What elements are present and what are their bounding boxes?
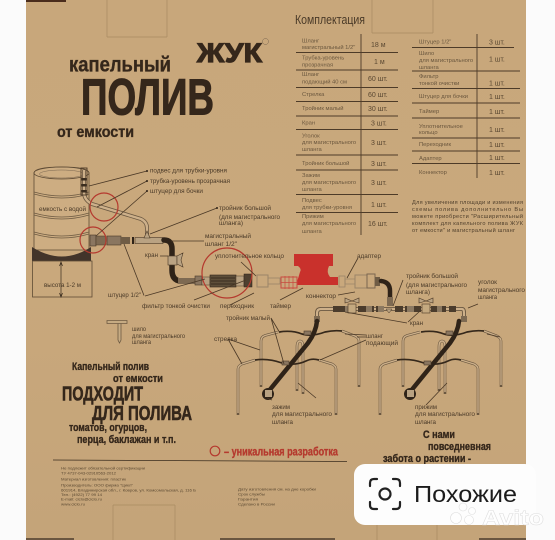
red circles xyxy=(80,193,252,298)
label: tank: емкость с водой xyxy=(39,206,87,213)
text block: certification: Материал изготовления: пластик xyxy=(61,478,126,482)
text block: expansion note: схемы полива дополнительно Вы xyxy=(412,207,523,213)
text block: expansion note: Для увеличения площади и изменения xyxy=(412,200,523,206)
logo: Жук: ЖУК xyxy=(196,38,263,68)
table: contents right: шланга xyxy=(419,65,439,71)
labels: diagram callouts: таймер xyxy=(270,303,292,310)
labels: diagram callouts: прижим xyxy=(415,404,437,411)
table: contents left: Тройник малый xyxy=(302,105,343,112)
table: contents left: для трубки-уровня xyxy=(302,205,352,211)
text block: certification: 601914, Владимирская обл., г. Ковров, ул. Комсомольская, д. 116 Б xyxy=(61,488,197,492)
table: contents left: 3 шт. xyxy=(371,161,387,168)
table: contents right: тонкой очистки xyxy=(419,80,459,87)
labels: diagram callouts: шланг 1/2" xyxy=(205,241,237,248)
table: contents left: Шланг xyxy=(302,38,319,44)
text block: certification xyxy=(61,466,197,506)
labels: diagram callouts: адаптер xyxy=(357,253,382,260)
table: contents right: 1 шт. xyxy=(489,155,505,162)
table: contents left: Прижим xyxy=(302,214,324,220)
icon: awl with label: шланга xyxy=(132,339,152,346)
text block: production date: Дату изготовления см. на дне коробки xyxy=(238,488,316,492)
labels: diagram callouts: для магистрального xyxy=(415,411,476,418)
table: contents right: Адаптер xyxy=(419,156,442,162)
title: капельный xyxy=(69,54,171,76)
text block: suitability: перца, баклажан и т.п. xyxy=(77,434,176,446)
table: contents right xyxy=(412,34,520,178)
table: contents right: Фильтр xyxy=(419,74,438,80)
leader lines xyxy=(89,170,500,405)
table: contents left: Стрелка xyxy=(302,92,325,98)
table: contents right: кольцо xyxy=(419,130,438,136)
text block: production date xyxy=(238,488,316,506)
text block: certification: www.ciclo.ru xyxy=(61,502,85,506)
title: от емкости xyxy=(57,124,134,141)
diagram: main line with filter xyxy=(90,231,280,287)
text block: suitability: ПОДХОДИТ xyxy=(62,384,143,406)
labels: diagram callouts: шланга xyxy=(272,419,294,426)
table: contents left: для магистрального xyxy=(302,140,356,146)
text block: expansion note xyxy=(412,200,524,234)
diagram: red timer xyxy=(281,254,338,289)
text block: production date: Сделано в России xyxy=(238,502,275,506)
labels: diagram callouts: штуцер для бочки xyxy=(150,188,204,195)
table: contents right: 1 шт. xyxy=(489,170,505,177)
text block: suitability: томатов, огурцов, xyxy=(69,422,147,434)
table: contents left: шланга xyxy=(302,147,322,153)
labels: diagram callouts: для магистрального xyxy=(272,411,333,418)
text block: suitability: от емкости xyxy=(113,373,163,385)
labels: diagram callouts: шланга) xyxy=(406,289,430,296)
labels: diagram callouts: тройник большой xyxy=(219,205,272,212)
divider xyxy=(53,460,347,462)
labels: diagram callouts: тройник большой xyxy=(406,273,459,280)
button: similar items xyxy=(354,464,536,525)
label: height: высота 1-2 м xyxy=(44,282,81,289)
table: contents right: Шило xyxy=(419,51,434,57)
table: contents left: 60 шт. xyxy=(368,76,388,83)
text block: expansion note: от емкости" и магистральный шланг xyxy=(412,227,515,234)
text block: suitability: ДЛЯ ПОЛИВА xyxy=(92,403,192,425)
table: contents right: Коннектор xyxy=(419,170,447,176)
watermark: Avito: Avito xyxy=(482,507,544,530)
labels: diagram callouts xyxy=(108,168,526,426)
labels: diagram callouts: магистральный xyxy=(205,233,252,240)
slogan xyxy=(383,429,491,465)
text block: expansion note: можете приобрести "Расширительный xyxy=(412,213,523,220)
table: contents left: 3 шт. xyxy=(371,180,387,187)
text block: production date: Срок службы xyxy=(238,492,265,496)
table: contents right: Переходник xyxy=(419,142,451,148)
table: contents left: подающий 40 см xyxy=(302,78,347,86)
labels: diagram callouts: шланг xyxy=(366,333,384,340)
labels: diagram callouts: стрелка xyxy=(214,336,238,343)
labels: diagram callouts: уплотнительное кольцо xyxy=(215,253,285,260)
table: contents right: 1 шт. xyxy=(489,127,505,134)
labels: diagram callouts: фильтр тонкой очистки xyxy=(142,303,211,310)
table: contents left: для магистрального xyxy=(302,221,356,227)
text block: certification: E-mail: ciclo@ciclo.ru xyxy=(61,498,102,502)
labels: diagram callouts: коннектор xyxy=(306,293,337,300)
text block: certification: Не подлежит обязательной сертификации xyxy=(61,466,145,470)
labels: diagram callouts: (для магистрального xyxy=(406,282,468,289)
watermark: Avito xyxy=(450,503,544,530)
table: contents left: Кран xyxy=(302,120,315,126)
text block: certification: Производитель: ООО фирма "Цикл" xyxy=(61,484,134,488)
table: contents left: 3 шт. xyxy=(371,140,387,147)
diagram: water tank on stand xyxy=(32,167,92,297)
legend: unique design: – уникальная разработка xyxy=(224,444,338,458)
label: Похожие: Похожие xyxy=(414,481,517,507)
table: contents left: магистральный 1/2" xyxy=(302,44,355,51)
slogan: забота о растении - xyxy=(383,453,471,465)
table: contents right: Штуцер 1/2" xyxy=(419,40,451,46)
labels: diagram callouts: штуцер 1/2" xyxy=(108,292,141,299)
labels: diagram callouts: (для магистрального xyxy=(219,214,281,221)
table: contents left: шланга xyxy=(302,229,322,235)
diagram: right emitter set xyxy=(380,321,501,415)
icon: awl with label: для магистрального xyxy=(132,333,186,340)
table: contents left: Уголок xyxy=(302,134,320,140)
labels: diagram callouts: магистрального xyxy=(478,287,526,294)
table: contents right: 3 шт. xyxy=(489,40,505,46)
labels: diagram callouts: уголок xyxy=(478,279,497,286)
labels: diagram callouts: шланга xyxy=(478,294,498,301)
table: contents left: 16 шт. xyxy=(368,221,388,228)
table: contents left: шланга xyxy=(302,187,322,193)
labels: diagram callouts: шланга) xyxy=(219,220,243,227)
diagram: left emitter set xyxy=(238,321,359,415)
table: contents left: для магистрального xyxy=(302,180,356,186)
table: contents right: Таймер xyxy=(419,108,439,115)
table: contents right: 1 шт. xyxy=(489,56,505,64)
table: contents left: 1 шт. xyxy=(371,202,387,209)
table: contents left: Подвес xyxy=(302,198,322,204)
title xyxy=(57,54,214,141)
text block: suitability: Капельный полив xyxy=(72,361,149,373)
table: contents left: Тройник большой xyxy=(302,160,349,167)
table: contents left: 18 м xyxy=(371,42,386,49)
title: ПОЛИВ xyxy=(81,68,214,126)
table: contents left: Зажим xyxy=(302,173,320,179)
labels: diagram callouts: трубка-уровень прозрачная xyxy=(150,178,230,185)
table: contents left: 30 шт. xyxy=(368,106,388,113)
labels: diagram callouts: подающий xyxy=(366,340,399,347)
text block: certification: ТУ 4737-043-02910563-2012 xyxy=(61,472,116,476)
table: contents left: Трубка-уровень xyxy=(302,56,344,62)
table: contents right: для магистрального xyxy=(419,58,473,64)
icon: awl with label xyxy=(107,320,186,346)
text block: certification: Тел.: (4922) 77 99 14 xyxy=(61,493,102,497)
labels: diagram callouts: подвес для трубки-уровня xyxy=(150,168,227,174)
table: contents right: 1 шт. xyxy=(489,94,505,101)
table: contents left: 60 шт. xyxy=(368,92,388,99)
table: contents right: 1 шт. xyxy=(489,80,505,88)
labels: diagram callouts: шланга xyxy=(415,419,437,426)
slogan: повседневная xyxy=(428,441,491,453)
slogan: С нами xyxy=(423,429,455,441)
icon: awl with label: шило xyxy=(132,326,146,333)
heading: Комплектация: Комплектация xyxy=(295,13,365,27)
labels: diagram callouts: зажим xyxy=(272,404,290,411)
table: contents left xyxy=(296,34,398,235)
table: contents left: 3 шт. xyxy=(371,120,387,128)
icon: lens scan xyxy=(370,479,400,509)
table: contents right: Штуцер для бочки xyxy=(419,94,468,100)
table: contents left: 1 м xyxy=(374,59,385,66)
table: contents left: прозрачная xyxy=(302,62,333,68)
table: contents left: Шланг xyxy=(302,72,319,78)
table: contents right: 1 шт. xyxy=(489,142,505,149)
labels: diagram callouts: кран xyxy=(145,252,158,259)
table: contents right: 1 шт. xyxy=(489,109,505,116)
labels: diagram callouts: кран xyxy=(410,320,423,327)
diagram: connector and distribution line xyxy=(314,274,467,322)
text block: suitability xyxy=(62,361,192,446)
legend: unique design xyxy=(210,444,338,458)
labels: diagram callouts: переходник xyxy=(220,303,254,310)
text block: expansion note: комплект для капельного полива ЖУК xyxy=(412,221,524,227)
diagram: level tube xyxy=(81,168,147,234)
text block: production date: Гарантия xyxy=(238,498,258,502)
labels: diagram callouts: тройник малый xyxy=(226,315,271,322)
table: contents right: Уплотнительное xyxy=(419,124,463,130)
